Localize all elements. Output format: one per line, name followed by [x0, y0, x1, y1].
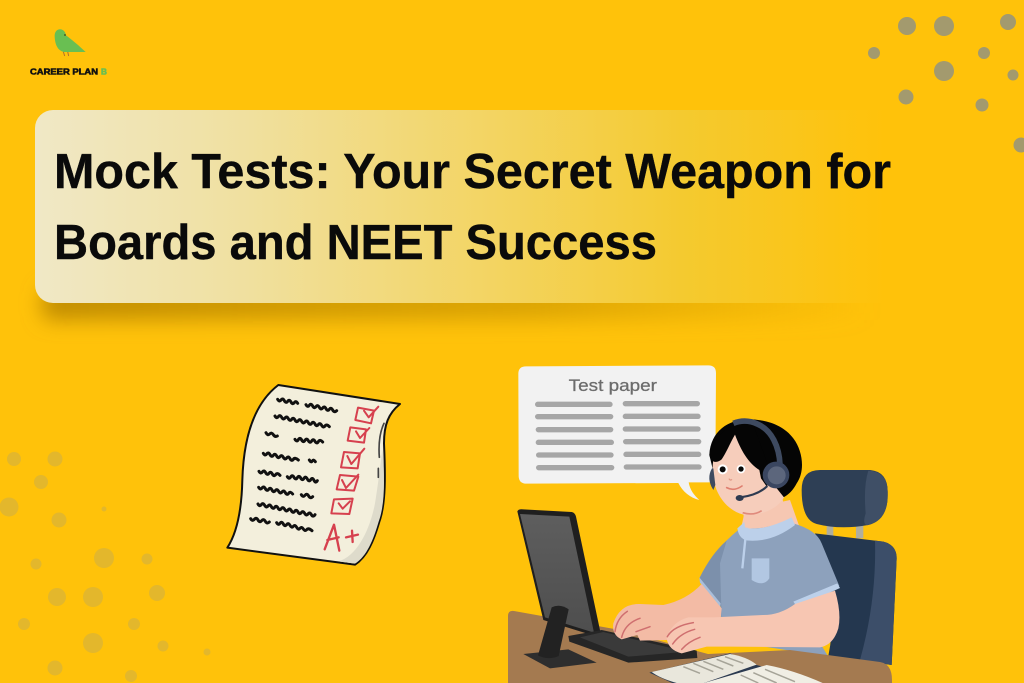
paper page shading [338, 450, 384, 564]
eyes and face details [718, 464, 745, 489]
banner shadow [42, 288, 872, 320]
hair back [709, 419, 802, 497]
computer monitor [517, 509, 601, 668]
neck [743, 495, 787, 528]
icon: green bird [55, 29, 86, 56]
student head with headset [709, 419, 802, 528]
keyboard [568, 630, 697, 663]
headset [709, 421, 789, 501]
office chair [802, 470, 897, 665]
jaw line [743, 511, 762, 514]
illustration: graded test sheet [227, 385, 400, 565]
desk [508, 611, 892, 683]
checkboxes with ticks [325, 407, 378, 551]
speech bubble: test paper [518, 365, 716, 500]
face [713, 433, 784, 515]
student torso and shirt [699, 500, 840, 657]
title [54, 145, 891, 270]
decorative dots: top right [868, 14, 1024, 152]
paper sheet [227, 385, 400, 565]
title: Boards and NEET Success [54, 216, 657, 270]
title: Mock Tests: Your Secret Weapon for [54, 145, 891, 199]
decorative dots: bottom left [0, 452, 210, 682]
banner panel [35, 110, 885, 303]
test paper text lines [538, 404, 699, 468]
arms and hands [613, 584, 839, 653]
bubble heading: Test paper [569, 376, 658, 395]
fringe hair [709, 420, 767, 487]
grade A+ [325, 525, 358, 551]
bubble shape [518, 365, 716, 500]
open book [649, 653, 823, 683]
logo: Career Plan B [30, 29, 107, 76]
title banner [35, 110, 891, 303]
logo wordmark: CAREER PLAN [30, 68, 98, 76]
logo wordmark: B [101, 68, 107, 76]
scribbled answer lines [251, 399, 337, 531]
paper fold marks [378, 423, 384, 477]
illustration: student at computer [508, 419, 897, 683]
